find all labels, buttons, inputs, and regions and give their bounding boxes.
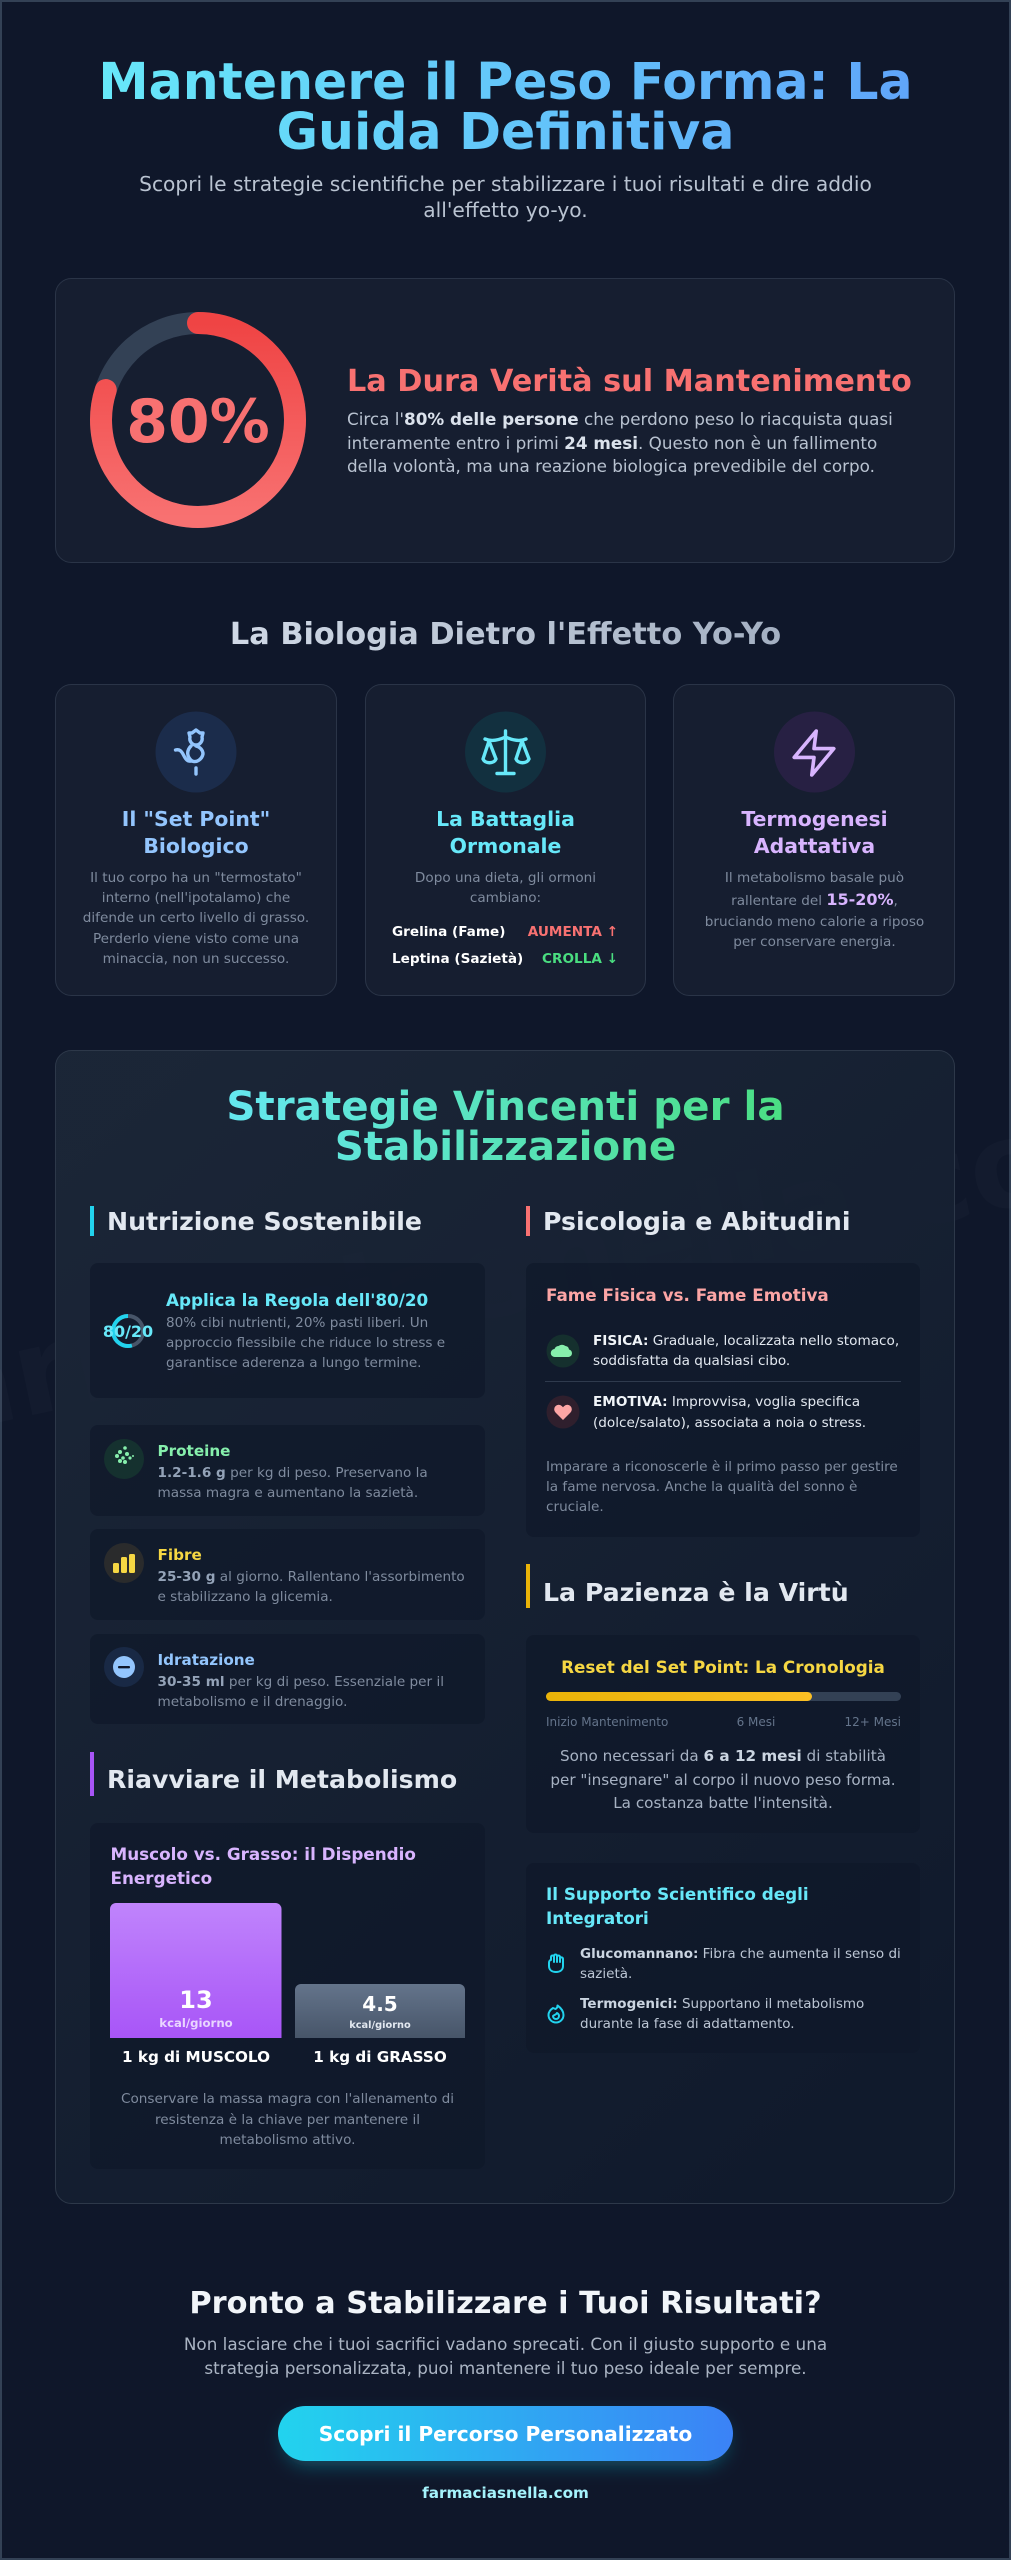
heading: muscolo vs grasso bbox=[110, 1844, 416, 1888]
row: fisica bbox=[546, 1333, 899, 1369]
heading: set point: Biologico bbox=[143, 834, 249, 858]
timeline labels: Inizio Mantenimento bbox=[546, 1715, 668, 1729]
row: termogenici: durante la fase di adattamento. bbox=[580, 2016, 795, 2032]
text: set point: difende un certo livello di grasso. bbox=[83, 910, 309, 926]
title: Guida Definitiva bbox=[277, 102, 734, 161]
row: leptina: Leptina (Sazietà) bbox=[392, 951, 523, 967]
title bbox=[98, 52, 913, 161]
panel: strategie bbox=[56, 1050, 954, 2204]
icon: set point bbox=[156, 712, 236, 792]
chart: 80% ring bbox=[101, 323, 295, 517]
text: fame nervosa: la fame nervosa. Anche la qualità del sonno è bbox=[546, 1479, 857, 1495]
heading: proteine: Proteine bbox=[158, 1442, 230, 1460]
row: fisica: soddisfatta da qualsiasi cibo. bbox=[593, 1353, 790, 1369]
timeline labels bbox=[546, 1715, 901, 1729]
text: cronologia: per "insegnare" al corpo il nuovo peso forma. bbox=[550, 1771, 896, 1789]
bar: muscolo: kcal/giorno bbox=[159, 2016, 233, 2030]
heading: muscolo vs grasso: Muscolo vs. Grasso: il Dispendio bbox=[110, 1844, 416, 1864]
row: glucomannano: sazietà. bbox=[580, 1966, 632, 1982]
icon: hand bbox=[549, 1954, 563, 1972]
text: regola 80/20: 80% cibi nutrienti, 20% pasti liberi. Un bbox=[166, 1315, 428, 1331]
text: termogenesi bbox=[705, 870, 924, 950]
icon: idratazione bbox=[104, 1647, 144, 1687]
text: proteine: 1.2-1.6 g per kg di peso. Preservano la bbox=[158, 1465, 428, 1481]
text: cronologia: La costanza batte l'intensità. bbox=[613, 1794, 833, 1812]
row: termogenici bbox=[548, 1996, 864, 2032]
row: leptina: CROLLA ↓ bbox=[542, 951, 618, 967]
card: fame fisica vs emotiva bbox=[526, 1263, 920, 1537]
heading: muscolo vs grasso: Energetico bbox=[110, 1868, 212, 1888]
button: Scopri il Percorso Personalizzato bbox=[319, 2422, 692, 2446]
panel: termogenesi bbox=[674, 684, 954, 996]
icon: bolt bbox=[774, 712, 855, 792]
timeline labels: 6 Mesi bbox=[737, 1715, 775, 1729]
heading: strategie: Stabilizzazione bbox=[335, 1122, 676, 1170]
row: emotiva bbox=[546, 1394, 866, 1431]
row: glucomannano bbox=[549, 1946, 901, 1982]
icon: fibre bbox=[104, 1543, 144, 1583]
heading: pazienza bbox=[526, 1564, 849, 1608]
icon: heart bbox=[546, 1396, 580, 1428]
progress bar bbox=[546, 1692, 901, 1701]
row: grelina: AUMENTA ↑ bbox=[528, 924, 618, 940]
bar: muscolo: 13 bbox=[179, 1986, 213, 2014]
text: set point bbox=[83, 870, 309, 967]
text: massa magra: resistenza è la chiave per mantenere il bbox=[155, 2112, 420, 2128]
text: termogenesi: bruciando meno calorie a riposo bbox=[705, 914, 924, 930]
text: set point: Il tuo corpo ha un "termostato" bbox=[90, 870, 302, 886]
row: emotiva: (dolce/salato), associata a noia o stress. bbox=[593, 1415, 866, 1431]
text: la dura verità bbox=[347, 409, 893, 476]
text: la dura verità: della volontà, ma una reazione biologica prevedibile del corpo. bbox=[347, 456, 875, 476]
heading: termogenesi bbox=[741, 807, 888, 858]
bar: grasso bbox=[295, 1984, 465, 2066]
card: idratazione bbox=[90, 1634, 485, 1724]
heading: integratori bbox=[546, 1884, 809, 1928]
card: cronologia bbox=[526, 1635, 920, 1833]
icon: proteine bbox=[104, 1439, 144, 1479]
text: fame nervosa: cruciale. bbox=[546, 1499, 604, 1515]
icon: cloud bbox=[546, 1334, 580, 1368]
card: integratori bbox=[526, 1863, 920, 2053]
heading: pazienza: La Pazienza è la Virtù bbox=[543, 1578, 849, 1607]
text: termogenesi: Il metabolismo basale può bbox=[725, 870, 904, 886]
text: battaglia intro: cambiano: bbox=[470, 890, 541, 906]
icon: 80/20 ring: 80/20 bbox=[103, 1322, 153, 1341]
heading: set point bbox=[122, 807, 270, 858]
text: la dura verità: Circa l'80% delle persone che perdono peso lo riacquista quasi bbox=[347, 409, 893, 429]
subtitle: Scopri le strategie scientifiche per stabilizzare i tuoi risultati e dire addio bbox=[139, 172, 872, 196]
text: massa magra: Conservare la massa magra con l'allenamento di bbox=[121, 2091, 454, 2107]
text: termogenesi: per conservare energia. bbox=[733, 934, 896, 950]
bar: grasso: 1 kg di GRASSO bbox=[313, 2048, 447, 2066]
text: set point: interno (nell'ipotalamo) che bbox=[102, 890, 290, 906]
heading: fibre: Fibre bbox=[158, 1546, 202, 1564]
text: cronologia bbox=[550, 1747, 896, 1812]
heading: battaglia ormonale: La Battaglia bbox=[436, 807, 575, 831]
text: battaglia intro bbox=[415, 870, 596, 906]
row: glucomannano: Glucomannano: Fibra che aumenta il senso di bbox=[580, 1946, 901, 1962]
text: termogenesi: rallentare del 15-20%, bbox=[731, 890, 898, 909]
heading: set point: Il "Set Point" bbox=[122, 807, 270, 831]
button bbox=[278, 2406, 733, 2466]
heading: battaglia ormonale bbox=[436, 807, 575, 858]
timeline labels: 12+ Mesi bbox=[845, 1715, 901, 1729]
chart: 80% ring: 80% bbox=[126, 387, 270, 457]
text: cronologia: Sono necessari da 6 a 12 mesi di stabilità bbox=[560, 1747, 886, 1765]
text: fame nervosa bbox=[546, 1459, 898, 1515]
card: fibre bbox=[90, 1529, 485, 1620]
text: pronto bbox=[184, 2334, 827, 2378]
heading: integratori: Il Supporto Scientifico degli bbox=[546, 1884, 809, 1904]
heading: termogenesi: Termogenesi bbox=[741, 807, 888, 831]
heading: pronto: Pronto a Stabilizzare i Tuoi Risultati? bbox=[189, 2286, 822, 2321]
text: la dura verità: interamente entro i primi 24 mesi. Questo non è un fallimento bbox=[347, 433, 877, 453]
text: massa magra: metabolismo attivo. bbox=[220, 2132, 355, 2148]
text: proteine: massa magra e aumentano la sazietà. bbox=[158, 1485, 418, 1501]
text: pronto: strategia personalizzata, puoi mantenere il tuo peso ideale per sempre. bbox=[204, 2358, 807, 2378]
heading: regola 80/20: Applica la Regola dell'80/20 bbox=[166, 1290, 428, 1310]
card: muscolo vs grasso bbox=[90, 1823, 485, 2169]
text: fibre: e stabilizzano la glicemia. bbox=[158, 1589, 333, 1605]
subtitle bbox=[139, 172, 872, 222]
bar: grasso: 4.5 bbox=[362, 1992, 398, 2016]
row: grelina bbox=[392, 924, 618, 940]
text: massa magra bbox=[121, 2091, 454, 2148]
text: fame nervosa: Imparare a riconoscerle è il primo passo per gestire bbox=[546, 1459, 898, 1475]
card: proteine bbox=[90, 1425, 485, 1516]
text: set point: Perderlo viene visto come una bbox=[93, 931, 299, 947]
heading: la dura verità: La Dura Verità sul Mantenimento bbox=[347, 364, 912, 399]
bar: muscolo bbox=[110, 1903, 282, 2066]
panel: set point bbox=[56, 684, 336, 996]
title: Mantenere il Peso Forma: La bbox=[98, 52, 913, 111]
text: pronto: Non lasciare che i tuoi sacrifici vadano sprecati. Con il giusto supporto e una bbox=[184, 2334, 827, 2354]
heading: strategie: Strategie Vincenti per la bbox=[226, 1082, 785, 1130]
heading: biologia: La Biologia Dietro l'Effetto Yo-Yo bbox=[230, 617, 781, 652]
heading: battaglia ormonale: Ormonale bbox=[450, 834, 561, 858]
row: leptina bbox=[392, 951, 618, 967]
text: regola 80/20: approccio flessibile che riduce lo stress e bbox=[166, 1335, 445, 1351]
text: regola 80/20 bbox=[166, 1315, 445, 1371]
heading: integratori: Integratori bbox=[546, 1908, 649, 1928]
text: battaglia intro: Dopo una dieta, gli ormoni bbox=[415, 870, 596, 886]
text: idratazione: 30-35 ml per kg di peso. Essenziale per il bbox=[158, 1674, 444, 1690]
heading: nutrizione: Nutrizione Sostenibile bbox=[107, 1207, 422, 1236]
heading: cronologia: Reset del Set Point: La Cronologia bbox=[561, 1657, 885, 1677]
subtitle: all'effetto yo-yo. bbox=[423, 198, 588, 222]
heading: termogenesi: Adattativa bbox=[754, 834, 875, 858]
heading: idratazione: Idratazione bbox=[158, 1651, 255, 1669]
text: proteine bbox=[158, 1465, 428, 1501]
bar: muscolo: 1 kg di MUSCOLO bbox=[122, 2048, 270, 2066]
heading: metabolismo bbox=[90, 1752, 457, 1796]
text: set point: minaccia, non un successo. bbox=[103, 951, 289, 967]
card: regola 80/20 bbox=[90, 1263, 485, 1398]
icon: flame bbox=[548, 2006, 564, 2023]
row: grelina: Grelina (Fame) bbox=[392, 924, 505, 940]
heading: strategie bbox=[226, 1082, 785, 1170]
bar: grasso: kcal/giorno bbox=[349, 2020, 411, 2031]
text: idratazione: metabolismo e il drenaggio. bbox=[158, 1694, 347, 1710]
row: termogenici: Termogenici: Supportano il metabolismo bbox=[580, 1996, 864, 2012]
panel: la dura verità bbox=[56, 278, 954, 562]
heading: fame: Fame Fisica vs. Fame Emotiva bbox=[546, 1285, 829, 1305]
row: fisica: FISICA: Graduale, localizzata nello stomaco, bbox=[593, 1333, 899, 1349]
text: idratazione bbox=[158, 1674, 444, 1710]
footer link: farmaciasnella.com bbox=[422, 2484, 589, 2502]
text: fibre: 25-30 g al giorno. Rallentano l'assorbimento bbox=[158, 1569, 465, 1585]
heading: metabolismo: Riavviare il Metabolismo bbox=[107, 1765, 457, 1794]
icon: 80/20 ring bbox=[103, 1316, 153, 1346]
row: emotiva: EMOTIVA: Improvvisa, voglia specifica bbox=[593, 1394, 860, 1410]
text: regola 80/20: garantisce aderenza a lungo termine. bbox=[166, 1355, 422, 1371]
text: fibre bbox=[158, 1569, 465, 1605]
icon: scales bbox=[465, 712, 546, 792]
panel: battaglia ormonale bbox=[366, 684, 646, 996]
heading: psicologia: Psicologia e Abitudini bbox=[543, 1207, 850, 1236]
